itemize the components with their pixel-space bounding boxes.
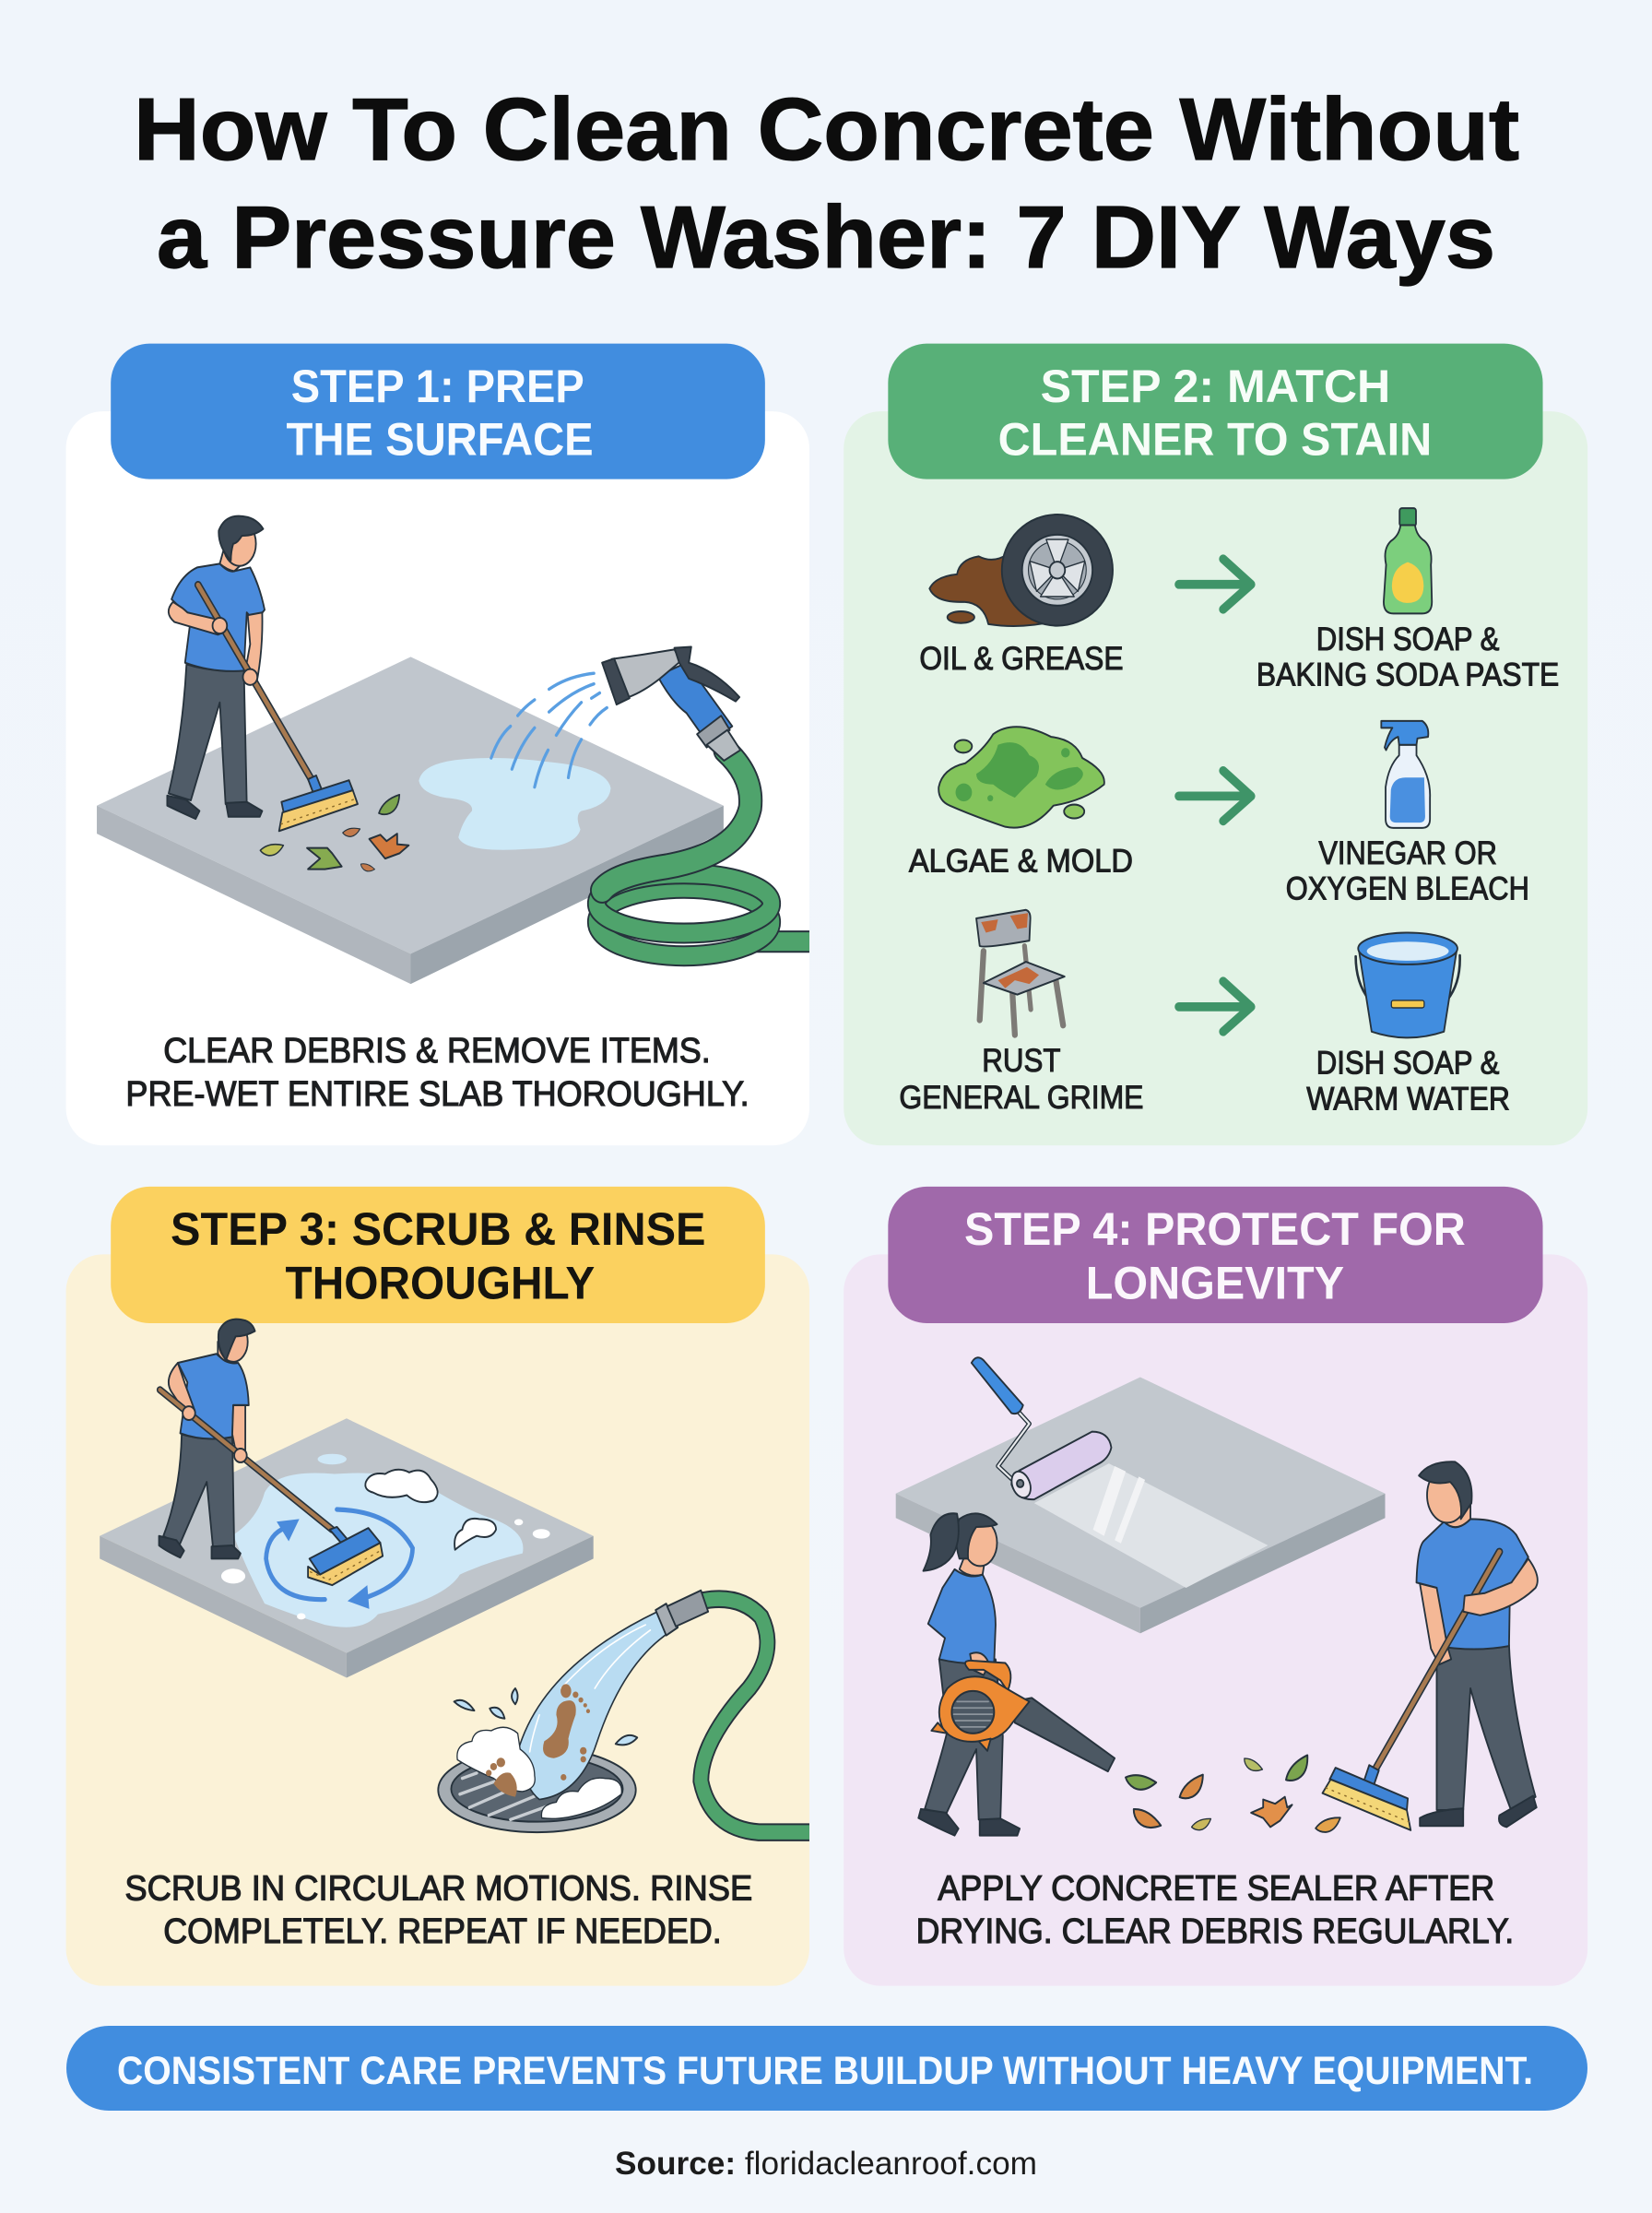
label: vinegar or oxygen bleach: VINEGAR OR [1318,836,1497,871]
label: vinegar or oxygen bleach: OXYGEN BLEACH [1286,871,1529,907]
title: a Pressure Washer: 7 DIY Ways [157,188,1495,287]
icon: oil stain and tire [929,515,1113,626]
water stream [518,1612,671,1800]
header pill: step 1: STEP 1: PREP [291,361,584,412]
header pill: step 3: STEP 3: SCRUB & RINSE [171,1204,706,1256]
caption: COMPLETELY. REPEAT IF NEEDED. [163,1911,722,1950]
push broom [279,775,358,831]
man sweeping [1372,1462,1538,1827]
hose nozzle [655,1591,708,1636]
header pill: step 4 [888,1187,1543,1323]
footer banner [66,2026,1587,2111]
fallen leaves [260,794,408,875]
paint roller [972,1357,1111,1501]
caption: CLEAR DEBRIS & REMOVE ITEMS. [163,1031,711,1070]
label: dish soap and baking soda paste [1257,622,1559,693]
man scrubbing [159,1320,332,1558]
source line: Source: floridacleanroof.com [615,2146,1037,2182]
soapy water [233,1473,523,1627]
label: rust and general grime [899,1044,1144,1116]
caption: SCRUB IN CIRCULAR MOTIONS. RINSE [124,1868,752,1908]
header pill: step 4: STEP 4: PROTECT FOR [964,1204,1466,1256]
header pill: step 3 [111,1187,765,1323]
caption: DRYING. CLEAR DEBRIS REGULARLY. [916,1911,1514,1950]
arrow: algae to vinegar [1179,771,1251,821]
man with broom [167,516,313,819]
panel: step 4 protect for longevity [844,1187,1587,1986]
label: algae and mold: ALGAE & MOLD [909,844,1133,880]
header pill: step 4: LONGEVITY [1086,1259,1344,1309]
header pill: step 3: THOROUGHLY [286,1259,595,1309]
caption [124,1868,752,1950]
spray nozzle [602,647,740,761]
concrete slab [100,1418,594,1678]
water spray [491,673,607,787]
foam at drain [457,1727,621,1818]
icon: rusty chair [976,910,1065,1035]
caption: PRE-WET ENTIRE SLAB THOROUGHLY. [125,1074,749,1114]
scattered leaves [1124,1754,1342,1836]
label: dish soap and baking soda paste: DISH SOAP & [1316,622,1499,657]
caption [916,1868,1514,1950]
panel: step 1 prep the surface [66,344,809,1145]
header pill: step 2: STEP 2: MATCH [1041,361,1390,412]
caption [125,1031,749,1114]
leaf blower [931,1661,1115,1771]
water droplets [454,1688,637,1745]
label: rust and general grime: RUST [982,1044,1061,1079]
small footprint in foam [486,1757,517,1797]
header pill: step 2: CLEANER TO STAIN [998,415,1432,466]
label: dish soap and warm water: DISH SOAP & [1316,1046,1499,1082]
icon: algae blob [938,727,1104,828]
label: oil and grease: OIL & GREASE [919,642,1124,678]
water puddle [419,758,611,850]
push broom [1323,1765,1410,1830]
header pill: step 2 [888,344,1543,479]
dirty footprint [543,1684,590,1781]
panel: step 2 match cleaner to stain [844,344,1587,1145]
panel: step 3 scrub and rinse [66,1187,809,1986]
caption: APPLY CONCRETE SEALER AFTER [938,1868,1494,1908]
header pill: step 1: THE SURFACE [287,415,594,466]
title: How To Clean Concrete Without [134,80,1519,179]
storm drain [438,1747,636,1832]
footer banner: CONSISTENT CARE PREVENTS FUTURE BUILDUP WITHOUT HEAVY EQUIPMENT. [117,2049,1533,2093]
icon: water bucket [1356,932,1460,1037]
concrete slab [97,657,724,984]
label: vinegar or oxygen bleach [1286,836,1529,907]
circular motion arrows [266,1509,413,1609]
arrow: oil to soap [1179,559,1251,609]
header pill: step 1 [111,344,765,479]
label: dish soap and warm water: WARM WATER [1306,1082,1510,1118]
scrub brush [308,1527,383,1585]
arrow: rust to dish soap [1179,981,1251,1032]
icon: dish soap bottle [1384,508,1432,613]
icon: spray bottle [1381,721,1430,828]
woman with leaf blower [918,1513,1020,1836]
white soap spots [221,1454,550,1619]
title [134,80,1519,287]
label: dish soap and warm water [1306,1046,1510,1118]
concrete slab with sealer [896,1378,1386,1633]
label: rust and general grime: GENERAL GRIME [899,1081,1144,1116]
soap foam [365,1470,496,1550]
garden hose [596,750,809,956]
hose [701,1599,809,1832]
label: dish soap and baking soda paste: BAKING SODA PASTE [1257,657,1559,693]
